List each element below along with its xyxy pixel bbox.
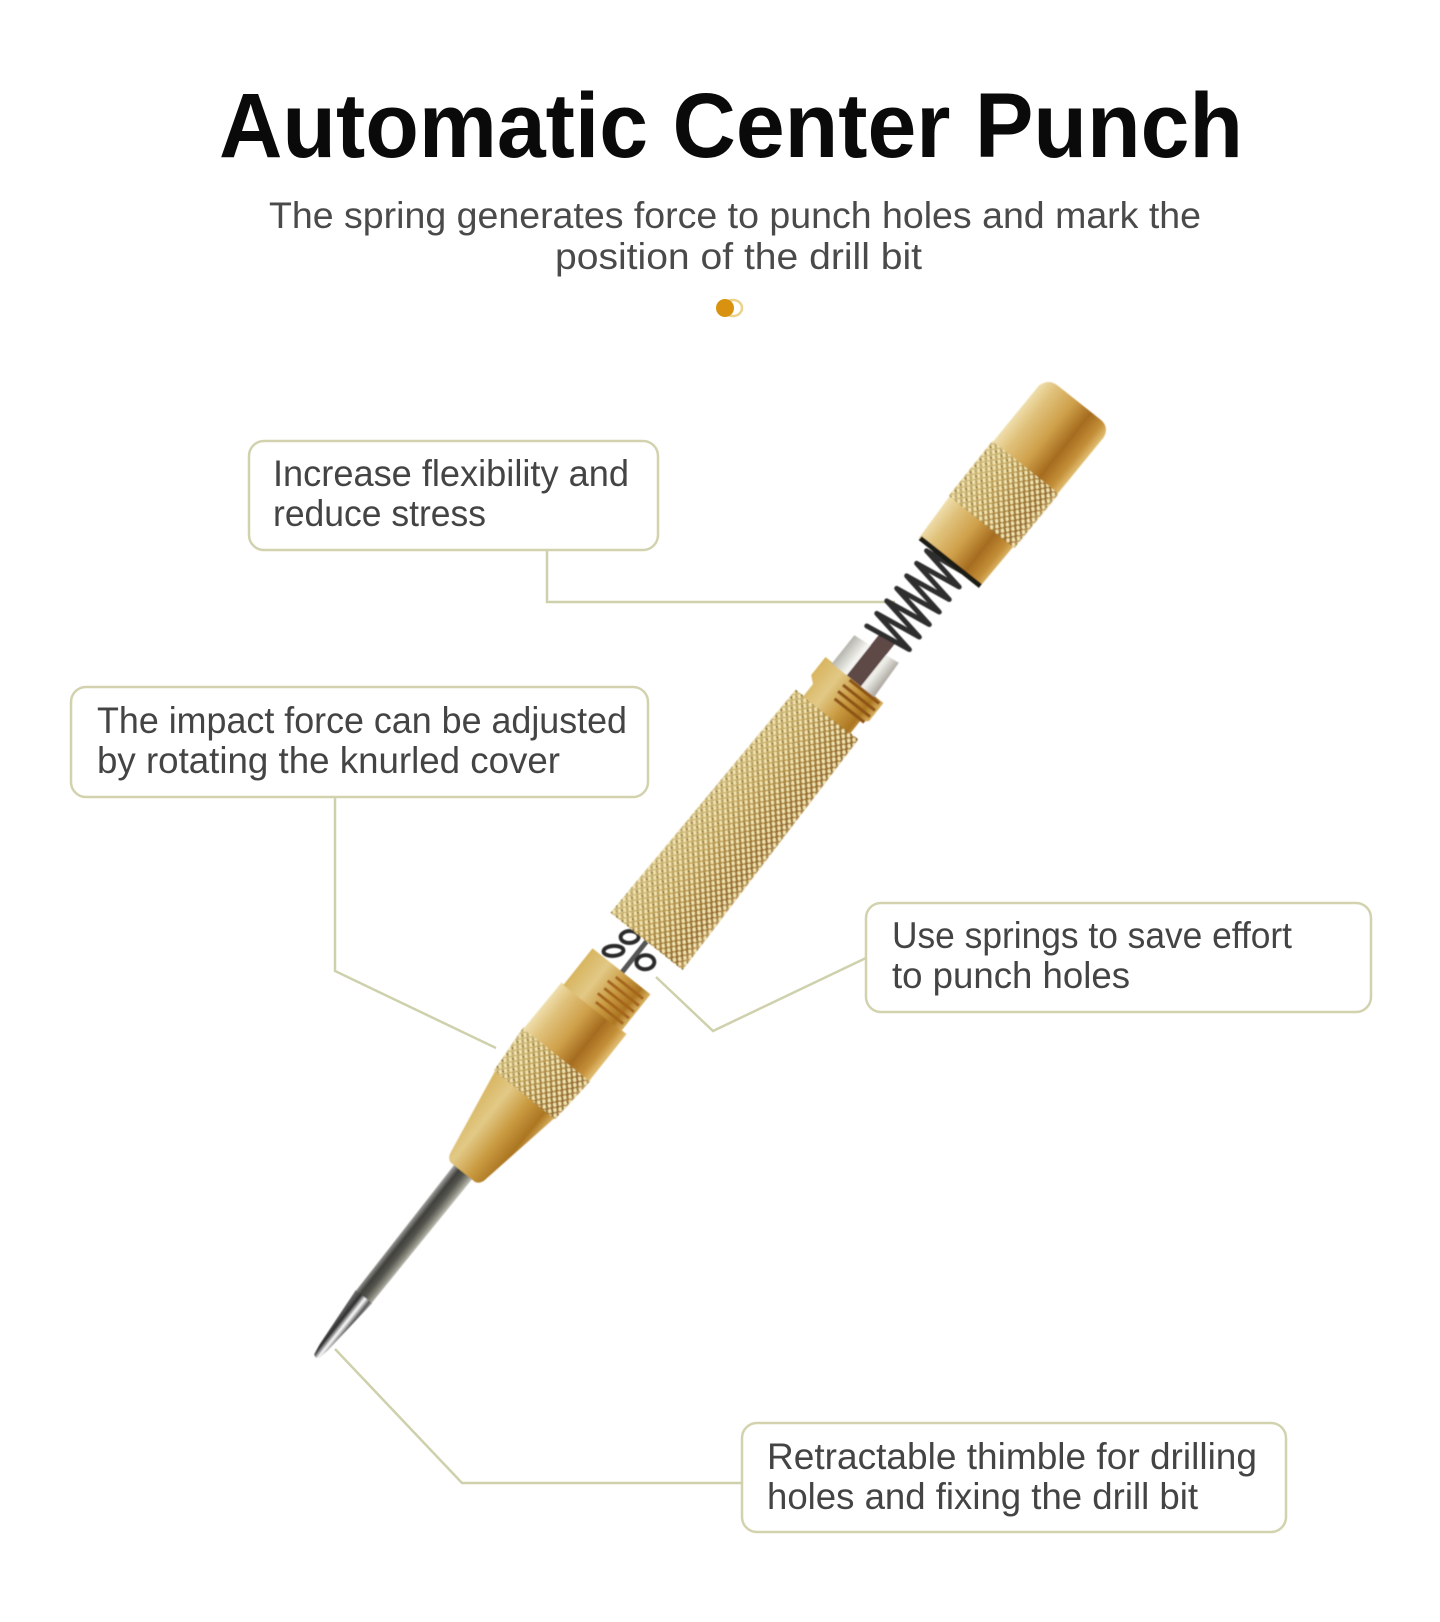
- lower knurled ring: [491, 1027, 591, 1122]
- silver sleeve: [832, 631, 900, 697]
- small lower spring and pin: [598, 919, 667, 987]
- illustration: center punch tool: [280, 372, 1113, 1386]
- subtitle: The spring generates force to punch holes and mark the: [269, 195, 1201, 236]
- icon: orange toggle dot: [716, 299, 742, 317]
- callout: retractable thimble: [742, 1423, 1286, 1532]
- callout: use springs: to punch holes: [892, 955, 1130, 996]
- compression spring: [867, 546, 968, 656]
- leader line: knurled cover: [335, 797, 496, 1048]
- callout: use springs: [866, 903, 1371, 1012]
- upper threaded collar: [798, 657, 883, 738]
- upper cap: [916, 375, 1111, 589]
- callout: impact force: [71, 687, 648, 797]
- callout: impact force: The impact force can be adjusted: [97, 700, 627, 741]
- title: Automatic Center Punch: [219, 75, 1243, 177]
- subtitle: position of the drill bit: [555, 236, 923, 277]
- steel needle shaft: [354, 1165, 472, 1305]
- leader line: springs save effort: [656, 958, 866, 1031]
- brass cone: [433, 1070, 555, 1196]
- callout: increase flexibility: reduce stress: [273, 493, 486, 534]
- callout: increase flexibility: Increase flexibility and: [273, 453, 629, 494]
- callout: impact force: by rotating the knurled cover: [97, 740, 560, 781]
- callout: retractable thimble: holes and fixing the drill bit: [767, 1476, 1199, 1517]
- callout: increase flexibility: [249, 441, 658, 550]
- needle point: [307, 1290, 372, 1364]
- leader line: retractable thimble: [335, 1349, 741, 1483]
- main knurled body: [611, 686, 863, 970]
- callout: use springs: Use springs to save effort: [892, 915, 1293, 956]
- subtitle: [269, 195, 1201, 277]
- lower barrel: [523, 982, 627, 1081]
- lower threaded neck: [563, 948, 650, 1031]
- callout: retractable thimble: Retractable thimble for drilling: [767, 1436, 1257, 1477]
- dark inner pin: [847, 631, 896, 686]
- leader line: spring flexibility: [547, 551, 895, 602]
